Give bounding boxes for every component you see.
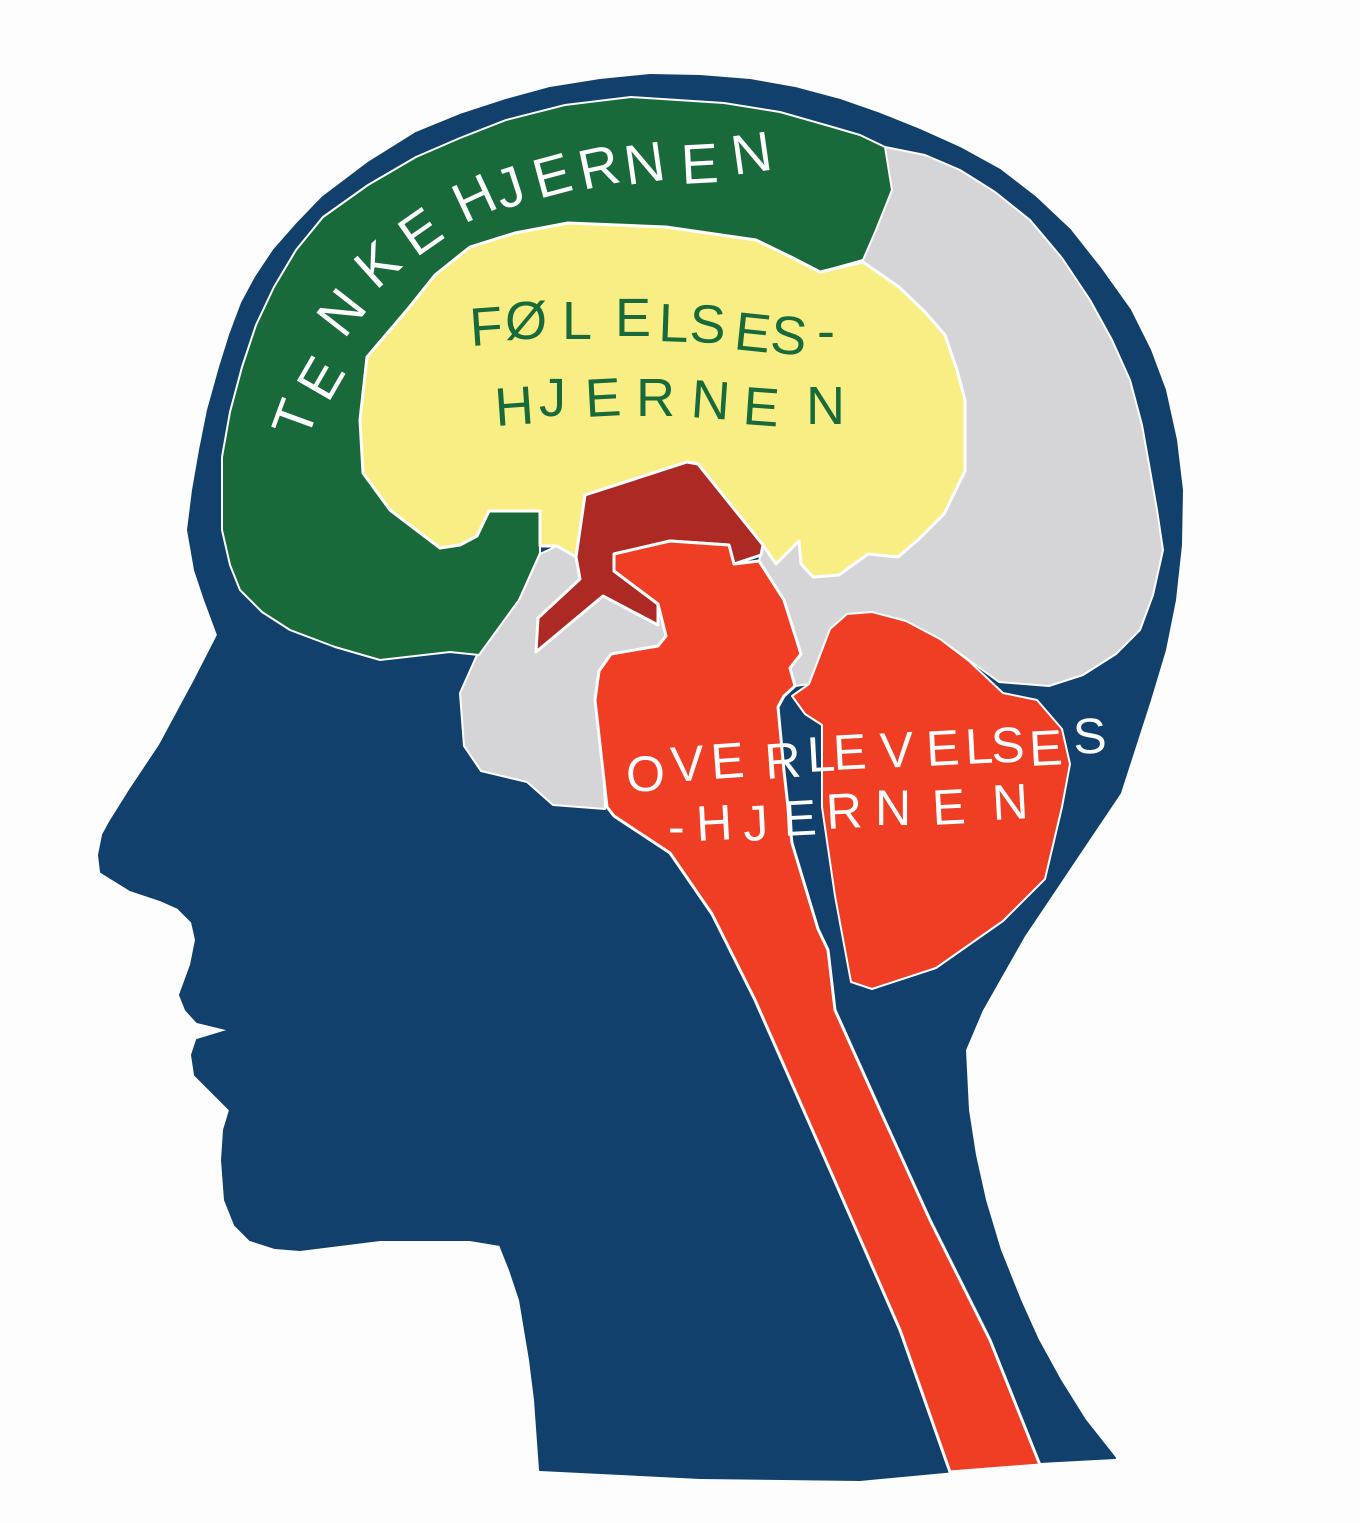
label: Følelses-: FØLELSES- bbox=[468, 288, 835, 368]
region: Tenkehjernen (green) bbox=[222, 97, 892, 660]
region: Følelseshjernen (yellow) bbox=[360, 223, 965, 577]
region: grey brain mass, lower bbox=[460, 546, 670, 809]
region: limbic detail (dark red) bbox=[536, 462, 763, 652]
label: Overlevelses: OVERLEVELSES bbox=[626, 707, 1108, 802]
label: -hjernen (white): -HJERNEN bbox=[668, 773, 1030, 855]
region: grey brain mass, upper bbox=[759, 147, 1163, 686]
label: hjernen (green): HJERNEN bbox=[493, 367, 845, 438]
head silhouette bbox=[99, 75, 1182, 1480]
region: brain stem and spinal cord (orange) bbox=[595, 541, 1040, 1472]
label: Tenkehjernen: TENKEHJERNEN bbox=[259, 119, 776, 445]
region: cerebellum (orange) bbox=[792, 612, 1070, 989]
